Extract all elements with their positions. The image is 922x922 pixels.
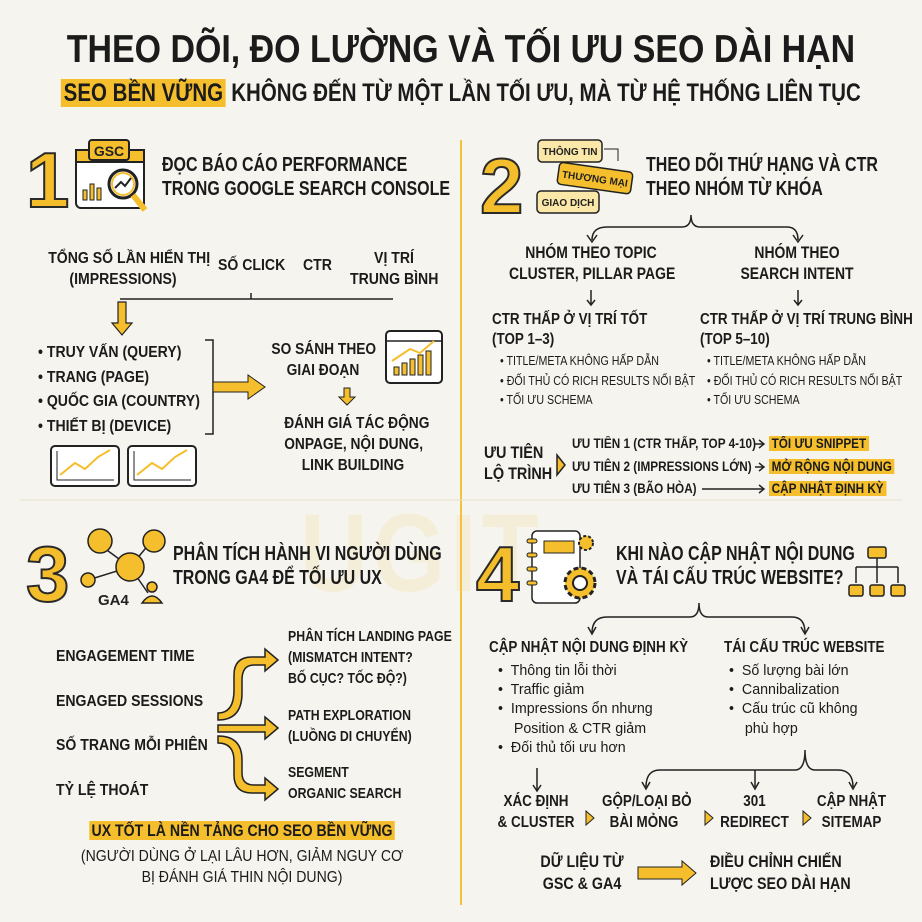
panel 4: updates: GỘP/LOẠI BỎ [602,793,692,810]
priority roadmap [484,443,552,483]
panel 2: rankings: • ĐỐI THỦ CÓ RICH RESULTS NỔI BẬT [707,372,902,388]
dimension list: • TRUY VẤN (QUERY) [38,344,181,361]
impact text: LINK BUILDING [302,457,404,474]
panel 4: updates: • Traffic giảm [498,681,584,698]
heading 2: THEO DÕI THỨ HẠNG VÀ CTR [646,154,878,176]
panel 3: GA4: SEGMENT [288,764,349,781]
panel 4: updates: REDIRECT [720,814,789,831]
panel 4: updates: LƯỢC SEO DÀI HẠN [710,874,851,893]
icon: GA4 network [80,528,166,609]
low ctr left: (TOP 1–3) [492,331,554,348]
icon: intent bubbles: GIAO DỊCH [542,198,594,209]
subtitle: SEO BỀN VỮNG KHÔNG ĐẾN TỪ MỘT LẦN TỐI ƯU, MÀ TỪ HỆ THỐNG LIÊN TỤC [64,79,861,107]
heading 3: PHÂN TÍCH HÀNH VI NGƯỜI DÙNG [173,543,442,565]
number 1: 1 [26,136,69,224]
arrows: branching [217,648,280,802]
icon: GSC: GSC [94,143,124,159]
low ctr left: CTR THẤP Ở VỊ TRÍ TỐT [492,311,647,328]
number 2: 2 [480,142,523,230]
low ctr left [492,310,648,348]
panel 4: updates: • Cannibalization [729,681,839,698]
panel 4: updates: • Số lượng bài lớn [729,662,849,679]
low ctr right: (TOP 5–10) [700,331,770,348]
icon: sitemap [848,546,906,597]
heading 4 [616,542,855,589]
panel 3: GA4: (NGƯỜI DÙNG Ở LẠI LÂU HƠN, GIẢM NGUY CƠ [81,848,403,865]
metrics list: SỐ TRANG MỖI PHIÊN [56,737,208,754]
icon: notebook & gears [526,530,596,604]
impact text: ĐÁNH GIÁ TÁC ĐỘNG [284,415,429,432]
icon: GSC [75,139,148,212]
low ctr right: CTR THẤP Ở VỊ TRÍ TRUNG BÌNH [700,311,913,328]
dimension list [38,343,200,434]
heading 3: TRONG GA4 ĐỂ TỐI ƯU UX [173,567,382,589]
panel 4: updates: ĐIỀU CHỈNH CHIẾN [710,852,842,871]
panel 4: updates: Position & CTR giảm [514,720,646,737]
heading 2 [646,152,878,200]
connector and arrows [50,293,443,487]
panel 4: updates: SITEMAP [822,814,881,831]
metrics list [56,648,208,798]
restructure column: TÁI CẤU TRÚC WEBSITE [724,639,885,656]
callout: UX TỐT LÀ NỀN TẢNG CHO SEO BỀN VỮNG [92,821,392,840]
metrics list: ENGAGEMENT TIME [56,648,194,665]
panel 2: rankings: MỞ RỘNG NỘI DUNG [772,458,892,474]
metrics list: TỶ LỆ THOÁT [56,782,148,798]
outcomes [288,628,452,687]
conclusion: DỮ LIỆU TỪ [540,852,624,871]
dimension list: • QUỐC GIA (COUNTRY) [38,393,200,410]
panel 3: GA4: PATH EXPLORATION [288,707,411,724]
compare text [271,340,376,379]
panel 3: GA4: (LUỒNG DI CHUYỂN) [288,728,412,745]
panel 2: rankings: ƯU TIÊN 2 (IMPRESSIONS LỚN) [572,458,752,474]
panel 4: updates [476,530,906,893]
panel 3: GA4 [26,528,452,886]
panel 3: GA4: BỊ ĐÁNH GIÁ THIN NỘI DUNG) [142,869,342,886]
panel 2: rankings: • TỐI ƯU SCHEMA [707,392,800,407]
impact text: ONPAGE, NỘI DUNG, [284,436,423,453]
dimension list: • THIẾT BỊ (DEVICE) [38,418,171,434]
compare text: GIAI ĐOẠN [287,362,359,379]
panel 4: updates: BÀI MỎNG [610,814,678,831]
metrics: TỔNG SỐ LẦN HIỂN THỊ [48,250,210,267]
icon: intent bubbles: THƯƠNG MẠI [561,170,629,190]
priority roadmap: ƯU TIÊN [484,443,543,462]
panel 2: rankings: SEARCH INTENT [740,264,854,283]
panel 2: rankings: • TỐI ƯU SCHEMA [500,392,593,407]
panel 2: rankings: • ĐỐI THỦ CÓ RICH RESULTS NỔI BẬT [500,372,695,388]
compare text: SO SÁNH THEO [271,341,376,358]
watermark: UGIT [300,492,544,615]
number 4: 4 [476,530,519,618]
heading 4: KHI NÀO CẬP NHẬT NỘI DUNG [616,543,855,565]
panel 4: updates: CẬP NHẬT [817,793,886,810]
heading 3 [173,542,442,589]
panel 1: GSC: SỐ CLICK [218,257,285,274]
heading 1: ĐỌC BÁO CÁO PERFORMANCE [162,154,407,176]
panel 4: updates: 301 [743,793,766,810]
priority roadmap: LỘ TRÌNH [484,464,552,483]
panel 2: rankings: TỐI ƯU SNIPPET [772,436,866,451]
icon: GA4 network: GA4 [98,592,130,609]
outcomes: BỐ CỤC? TỐC ĐỘ?) [288,670,407,687]
low ctr right [700,310,913,348]
panel 2: rankings: CLUSTER, PILLAR PAGE [509,264,675,283]
steps: XÁC ĐỊNH [504,793,568,810]
panel 1: GSC: VỊ TRÍ [374,250,414,267]
panel 1: GSC: CTR [303,257,332,274]
panel 4: updates: • Cấu trúc cũ không [729,700,858,717]
panel 2: rankings: ƯU TIÊN 1 (CTR THẤP, TOP 4-10) [572,436,756,451]
panel 2: rankings: • TITLE/META KHÔNG HẤP DẪN [707,353,866,368]
panel 1: GSC: TRUNG BÌNH [350,271,438,288]
conclusion [540,852,624,893]
panel 4: updates: phù hợp [745,720,798,737]
panel 2: rankings: CẬP NHẬT ĐỊNH KỲ [772,481,884,496]
title: THEO DÕI, ĐO LƯỜNG VÀ TỐI ƯU SEO DÀI HẠN [67,28,855,71]
panel 4: updates: • Thông tin lỗi thời [498,662,617,679]
panel 3: GA4: ORGANIC SEARCH [288,785,401,802]
number 3: 3 [26,530,69,618]
panel 2: rankings: NHÓM THEO [754,243,840,262]
heading 1: TRONG GOOGLE SEARCH CONSOLE [162,178,450,200]
impact text [284,414,429,474]
outcomes: PHÂN TÍCH LANDING PAGE [288,628,452,645]
outcomes: (MISMATCH INTENT? [288,649,413,666]
icon: intent bubbles [536,139,634,214]
heading 1 [162,153,450,200]
panel 1: GSC [26,136,450,487]
panel 4: updates: • Đối thủ tối ưu hơn [498,739,626,756]
update content column: CẬP NHẬT NỘI DUNG ĐỊNH KỲ [489,639,688,656]
panel 2: rankings: • TITLE/META KHÔNG HẤP DẪN [500,353,659,368]
panel 4: updates: • Impressions ổn nhưng [498,700,653,717]
conclusion: GSC & GA4 [543,874,621,893]
heading 4: VÀ TÁI CẤU TRÚC WEBSITE? [616,567,844,589]
panel 2: rankings: ƯU TIÊN 3 (BÃO HÒA) [572,481,697,496]
flow lines [532,603,858,886]
branches [556,215,804,494]
metrics [48,248,210,288]
metrics: (IMPRESSIONS) [69,271,177,288]
metrics list: ENGAGED SESSIONS [56,692,203,710]
steps [498,792,574,831]
panel 2: rankings: NHÓM THEO TOPIC [525,243,657,262]
dimension list: • TRANG (PAGE) [38,368,149,386]
icon: intent bubbles: THÔNG TIN [542,145,598,158]
heading 2: THEO NHÓM TỪ KHÓA [646,178,823,200]
panel 2: rankings [480,139,913,496]
steps: & CLUSTER [498,814,574,831]
